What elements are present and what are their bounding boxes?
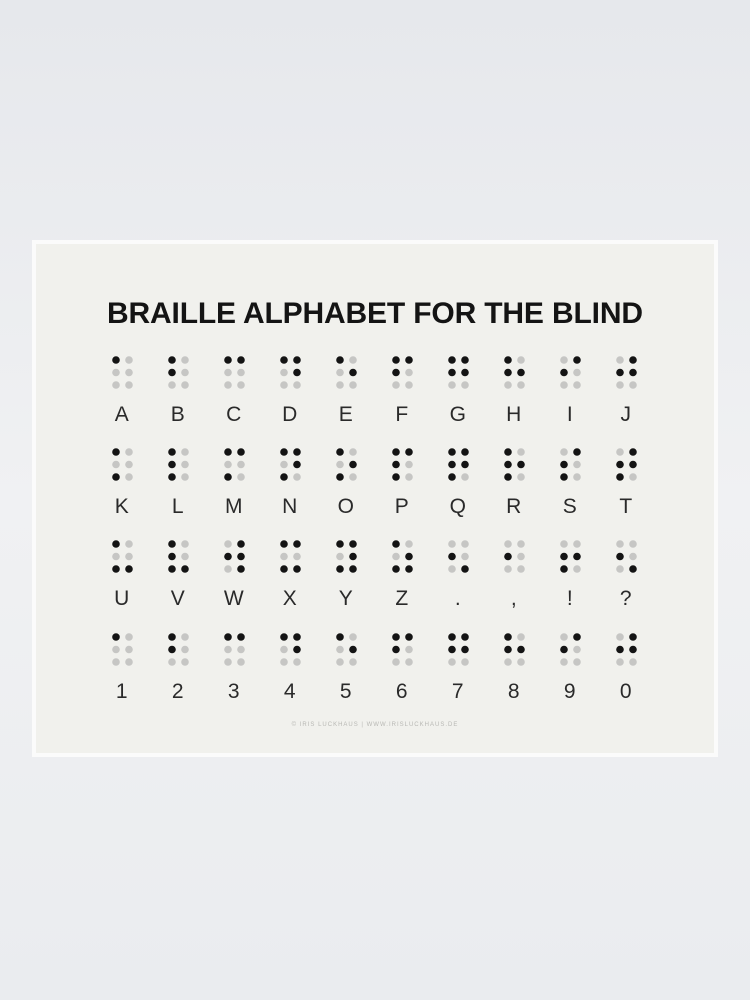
letters: 0	[620, 680, 632, 703]
letters: R	[506, 495, 522, 518]
letters: ?	[620, 587, 632, 610]
row 2	[112, 448, 133, 481]
row 1	[112, 356, 133, 389]
letters: 4	[284, 680, 296, 703]
title: BRAILLE ALPHABET FOR THE BLIND	[107, 297, 643, 330]
letters: 5	[340, 680, 352, 703]
letters: Q	[450, 495, 466, 518]
letters: 9	[564, 680, 576, 703]
letters: C	[226, 403, 242, 426]
letters: 7	[452, 680, 464, 703]
letters: 8	[508, 680, 520, 703]
letters	[114, 403, 633, 703]
letters: A	[115, 403, 129, 426]
letters: O	[338, 495, 354, 518]
letters: 6	[396, 680, 408, 703]
letters: S	[563, 495, 577, 518]
row 3	[112, 540, 133, 573]
letters: B	[171, 403, 185, 426]
letters: W	[224, 587, 244, 610]
letters: V	[171, 587, 185, 610]
letters: !	[567, 587, 573, 610]
footer credit: © IRIS LUCKHAUS | WWW.IRISLUCKHAUS.DE	[292, 721, 458, 728]
letters: U	[114, 587, 130, 610]
letters: X	[283, 587, 297, 610]
letters: Z	[395, 587, 409, 610]
letters: 3	[228, 680, 240, 703]
letters: E	[339, 403, 353, 426]
letters: N	[282, 495, 298, 518]
letters: G	[450, 403, 466, 426]
letters: D	[282, 403, 298, 426]
letters: K	[115, 495, 129, 518]
letters: Y	[339, 587, 353, 610]
letters: .	[455, 587, 461, 610]
letters: F	[395, 403, 409, 426]
letters: L	[172, 495, 184, 518]
letters: H	[506, 403, 522, 426]
braille dots	[112, 356, 637, 666]
poster	[32, 240, 718, 757]
letters: P	[395, 495, 409, 518]
letters: ,	[511, 587, 517, 610]
row 4	[112, 633, 133, 666]
letters: T	[619, 495, 633, 518]
letters: M	[225, 495, 243, 518]
letters: I	[567, 403, 573, 426]
letters: 2	[172, 680, 184, 703]
letters: J	[620, 403, 632, 426]
letters: 1	[116, 680, 128, 703]
